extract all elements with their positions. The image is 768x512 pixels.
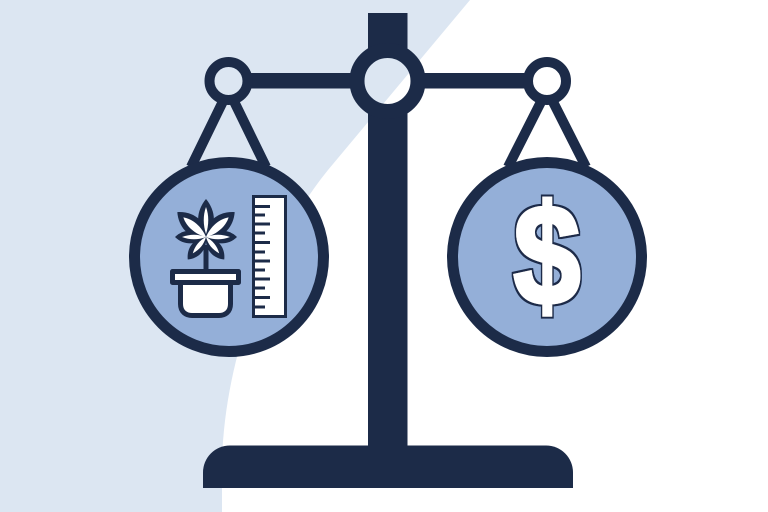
pan disc [134, 162, 324, 352]
post bottom [368, 108, 408, 448]
scale stand [203, 13, 573, 488]
white leaf veins [181, 207, 231, 255]
post top [368, 13, 408, 53]
left joint [210, 62, 248, 100]
ruler ticks [254, 206, 270, 307]
stem [204, 245, 208, 270]
left hanger [191, 90, 266, 167]
dark leaflets [171, 199, 241, 264]
right pan [452, 162, 642, 352]
icon: potted plant [171, 199, 241, 316]
pan disc [452, 162, 642, 352]
left pan [134, 162, 324, 352]
beam left [240, 73, 360, 88]
icon: ruler [254, 196, 286, 316]
base [203, 446, 573, 488]
leaf [171, 199, 241, 264]
right joint [528, 62, 566, 100]
right hanger [508, 90, 586, 167]
center pivot [357, 50, 418, 112]
ruler body [254, 196, 286, 316]
icon: dollar sign: $ [514, 175, 580, 334]
pot rim [172, 272, 238, 282]
beam right [415, 73, 535, 88]
background shape [0, 0, 470, 512]
pot body [180, 282, 230, 316]
